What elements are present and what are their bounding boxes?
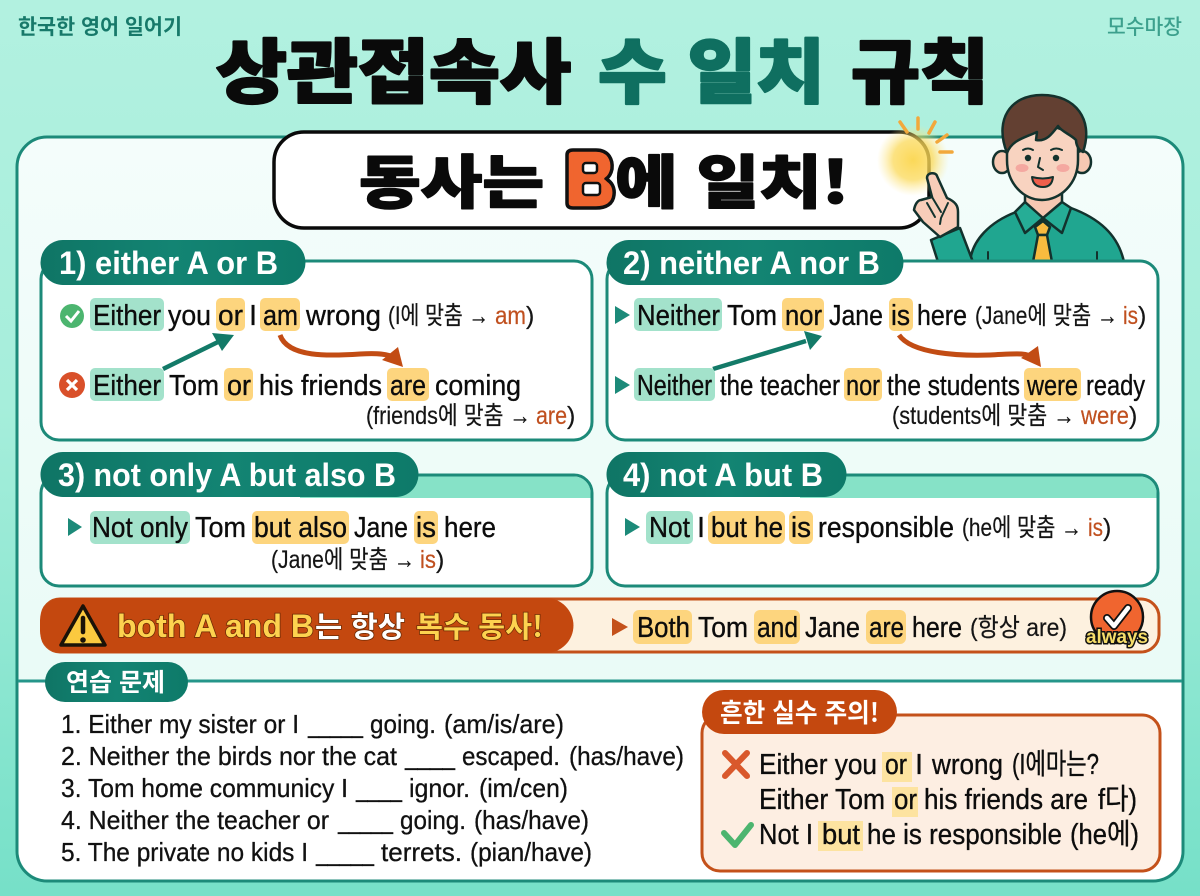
mistake lines: Either you (759, 749, 877, 781)
practice questions: 2. Neither the birds nor the cat (61, 741, 398, 771)
example sentence: here (444, 512, 496, 544)
example sentence: Jane (354, 512, 408, 544)
mistake lines: wrong (931, 749, 1003, 781)
practice questions: (am/is/are) (444, 709, 564, 739)
example sentence: Tom (698, 612, 748, 644)
example sentence 2: are (390, 370, 426, 402)
heading: 4) not A but B (623, 457, 823, 493)
icon: check (724, 825, 751, 845)
example sentence 1 (90, 298, 534, 332)
example sentence: Both (637, 612, 690, 644)
icon: always badge (1086, 591, 1148, 648)
example sentence 1: wrong (305, 300, 381, 332)
example sentence: is (420, 546, 436, 574)
title: 상관접속사 (216, 17, 571, 118)
mistake lines: Either Tom (759, 784, 885, 816)
panel: not only A but also B (40, 452, 592, 586)
example sentence 2: (students에 맞춤 → (892, 402, 1075, 430)
example sentence: are (869, 612, 904, 644)
practice questions: 4. Neither the teacher or (61, 805, 329, 835)
example sentence: but also (254, 512, 347, 544)
rule label: 복수 동사! (416, 604, 543, 646)
practice questions: (pian/have) (470, 837, 592, 867)
icon: check (60, 304, 84, 328)
practice questions: _____ (307, 709, 363, 739)
example sentence (625, 511, 1111, 544)
example sentence 1: ) (526, 302, 534, 330)
title (216, 17, 989, 118)
example sentence: and (757, 612, 798, 644)
example sentence 2: were (1026, 370, 1078, 402)
rule label: 는 항상 (315, 604, 405, 646)
example sentence 2: the students (887, 370, 1020, 402)
mistake lines: or (885, 749, 907, 781)
example sentence: Jane (805, 612, 860, 644)
example sentence: (항상 are) (970, 614, 1067, 642)
panel: either A or B (40, 240, 592, 440)
panel: both A and B rule (40, 591, 1159, 653)
callout banner: verb agrees with B: 에 일치! (615, 136, 849, 220)
teacher illustration (914, 95, 1124, 262)
example sentence 2: were (1080, 402, 1129, 430)
example sentence: here (912, 612, 962, 644)
brand label: 모수마장 (1107, 11, 1182, 41)
example sentence 1: you (168, 300, 211, 332)
example sentence 2: Either (93, 370, 161, 402)
example sentence 2 (615, 368, 1145, 430)
example sentence 2: nor (846, 370, 880, 402)
practice questions: (has/have) (474, 805, 589, 835)
example sentence 1: is (891, 300, 910, 332)
arrow: green (713, 331, 822, 369)
example sentence 2: (friends에 맞춤 → (366, 402, 531, 430)
example sentence 1: is (1123, 302, 1138, 330)
example sentence 2: are (536, 402, 567, 430)
example sentence 2: or (227, 370, 251, 402)
practice questions: ignor. (409, 773, 470, 803)
example sentence: is (791, 512, 811, 544)
arrow: orange (899, 335, 1041, 367)
panel: not A but B (606, 452, 1158, 586)
example sentence 1: Either (93, 300, 161, 332)
heading: 3) not only A but also B (58, 457, 396, 493)
panel: common mistakes (702, 690, 1160, 871)
heading (606, 452, 846, 497)
example sentence 2: ) (567, 402, 575, 430)
callout banner: verb agrees with B (274, 132, 929, 228)
icon: always badge: always (1086, 627, 1148, 648)
practice questions: (has/have) (569, 741, 684, 771)
callout banner: verb agrees with B: 동사는 (359, 136, 544, 220)
heading: 1) either A or B (59, 245, 278, 281)
rule label: both A and B (117, 608, 314, 644)
example sentence: Not only (92, 512, 188, 544)
mistake lines: (he에) (1070, 819, 1139, 851)
example sentence: (Jane에 맞춤 → (271, 546, 415, 574)
heading (40, 240, 306, 285)
example sentence 1: Jane (829, 300, 883, 332)
example sentence 2: coming (435, 370, 521, 402)
practice questions: 5. The private no kids I (61, 837, 308, 867)
practice questions: ____ (355, 773, 402, 803)
example sentence 1: or (218, 300, 243, 332)
arrow: green (163, 333, 234, 369)
example sentence 1: I (249, 300, 257, 332)
heading: 흔한 실수 주의! (720, 693, 879, 730)
practice questions: _____ (337, 805, 393, 835)
mistake lines: I (915, 749, 923, 781)
mistake lines (759, 749, 1139, 851)
mistake lines: his friends are (924, 784, 1088, 816)
example sentence 2: Neither (637, 370, 712, 402)
heading: 2) neither A nor B (623, 245, 880, 281)
example sentence: (he에 맞춤 → (962, 514, 1082, 542)
series label: 한국한 영어 일어기 (18, 11, 182, 41)
example sentence 1: Neither (637, 300, 720, 332)
panel: neither A nor B (606, 240, 1158, 440)
arrow: orange (280, 335, 403, 367)
example sentence 1: nor (785, 300, 822, 332)
example sentence: but he (711, 512, 783, 544)
mistake lines: or (894, 784, 917, 816)
example sentence: is (416, 512, 436, 544)
practice questions: 3. Tom home communicy I (61, 773, 348, 803)
icon: light glow on fingertip (877, 118, 952, 196)
practice questions: going. (370, 709, 436, 739)
example sentence 2: Tom (169, 370, 219, 402)
mistake lines: f다) (1098, 784, 1137, 816)
icon: cross (725, 753, 747, 776)
example sentence (612, 610, 1067, 644)
mistake lines: he is responsible (867, 819, 1062, 851)
icon: warning (61, 606, 105, 645)
practice questions (61, 709, 684, 867)
heading: practice (45, 662, 188, 702)
heading: practice: 연습 문제 (66, 663, 165, 699)
example sentence 1 (615, 298, 1146, 332)
example sentence 2: his friends (259, 370, 382, 402)
example sentence 2 (90, 368, 575, 430)
example sentence 1: Tom (727, 300, 777, 332)
practice questions: going. (400, 805, 466, 835)
example sentence 1: am (263, 300, 298, 332)
practice questions: (im/cen) (479, 773, 568, 803)
practice questions: terrets. (381, 837, 462, 867)
example sentence (68, 511, 496, 574)
icon: cross (59, 372, 85, 398)
example sentence 2: ) (1129, 402, 1137, 430)
example sentence: Tom (195, 512, 246, 544)
practice questions: ____ (404, 741, 455, 771)
rule label (40, 598, 573, 653)
example sentence 1: here (917, 300, 967, 332)
example sentence 2: the teacher (720, 370, 840, 402)
example sentence: ) (436, 546, 444, 574)
example sentence 2: ready (1086, 370, 1145, 402)
example sentence 1: (Jane에 맞춤 → (975, 302, 1118, 330)
example sentence 1: am (495, 302, 526, 330)
practice questions: _____ (315, 837, 374, 867)
mistake lines: (I에마는? (1012, 749, 1099, 781)
practice questions: escaped. (462, 741, 560, 771)
example sentence: Not (649, 512, 690, 544)
title: 규칙 (851, 17, 989, 118)
title: 수 일치 (598, 17, 825, 118)
example sentence: responsible (818, 512, 954, 544)
example sentence: is (1088, 514, 1103, 542)
mistake lines: but (822, 819, 860, 851)
mistake lines: Not I (759, 819, 813, 851)
example sentence 1: ) (1138, 302, 1146, 330)
example sentence: ) (1103, 514, 1111, 542)
practice questions: 1. Either my sister or I (61, 709, 299, 739)
example sentence: I (697, 512, 705, 544)
B highlight: B (570, 137, 612, 222)
example sentence 1: (I에 맞춤 → (388, 302, 489, 330)
